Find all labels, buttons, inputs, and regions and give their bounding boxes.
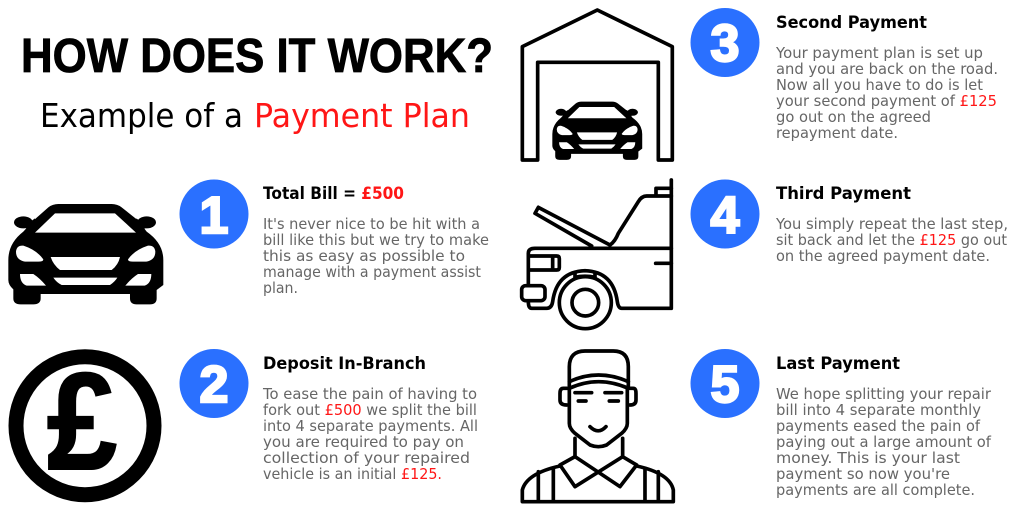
icon: garage with car [522, 10, 672, 160]
step 3 text [775, 44, 998, 142]
step 4 text: on the agreed payment date. [776, 247, 990, 265]
icon: pound coin [16, 345, 154, 499]
step 1 text: It's never nice to be hit with a [263, 215, 480, 233]
step 4 text [775, 215, 1008, 265]
icon: pound coin: £ [47, 345, 117, 499]
step 2 badge: 2 [200, 356, 228, 414]
step 5 badge [690, 349, 760, 418]
step 1 text: plan. [263, 279, 298, 297]
step 2 text: into 4 separate payments. All [263, 417, 478, 435]
step 5 text: payments eased the pain of [776, 417, 981, 435]
step 3 badge: 3 [711, 15, 739, 73]
step 4 heading: Third Payment [776, 184, 911, 204]
step 4 badge: 4 [711, 187, 740, 245]
step 5 text [776, 385, 992, 499]
title: HOW DOES IT WORK? [21, 30, 493, 83]
step 2 heading: Deposit In-Branch [263, 354, 426, 374]
step 2 text [262, 385, 478, 483]
step 3 text: repayment date. [776, 124, 898, 142]
step 5 heading: Last Payment [776, 354, 900, 374]
step 2 text: you are required to pay on [263, 433, 464, 451]
step 4 text: You simply repeat the last step, [775, 215, 1008, 233]
step 3 heading: Second Payment [776, 13, 927, 33]
step 5 text: payment so now you're [776, 465, 950, 483]
step 3 text: Now all you have to do is let [776, 76, 983, 94]
step 5 text: bill into 4 separate monthly [776, 401, 981, 419]
step 1 text: this as easy as possible to [263, 247, 465, 265]
step 1 text: manage with a payment assist [263, 263, 481, 281]
step 5 badge: 5 [711, 356, 739, 414]
step 2 text: To ease the pain of having to [262, 385, 477, 403]
step 1 badge: 1 [200, 187, 228, 245]
subtitle [40, 96, 470, 135]
step 2 text: fork out £500 we split the bill [263, 401, 477, 419]
subtitle: Payment Plan [254, 96, 470, 135]
step 5 text: money. This is your last [776, 449, 960, 467]
step 3 text: Your payment plan is set up [775, 44, 983, 62]
step 3 text: and you are back on the road. [776, 60, 998, 78]
icon: mechanic [522, 351, 673, 502]
step 1 text: bill like this but we try to make [263, 231, 489, 249]
step 4 badge [690, 180, 760, 248]
step 4 text: sit back and let the £125 go out [776, 231, 1007, 249]
step 2 text: vehicle is an initial £125. [263, 465, 442, 483]
subtitle: Example of a [40, 96, 243, 135]
step 1 heading: Total Bill = £500 [263, 184, 404, 204]
step 2 badge [180, 349, 248, 418]
step 3 text: go out on the agreed [776, 108, 931, 126]
icon: car front [8, 204, 163, 304]
step 3 badge [690, 8, 760, 77]
step 1 text [263, 215, 489, 297]
icon: open car bonnet [522, 180, 671, 329]
step 5 text: payments are all complete. [776, 481, 975, 499]
step 2 text: collection of your repaired [263, 449, 470, 467]
step 1 badge [180, 180, 248, 248]
step 3 text: your second payment of £125 [776, 92, 997, 110]
step 5 text: We hope splitting your repair [776, 385, 992, 403]
step 5 text: paying out a large amount of [776, 433, 992, 451]
